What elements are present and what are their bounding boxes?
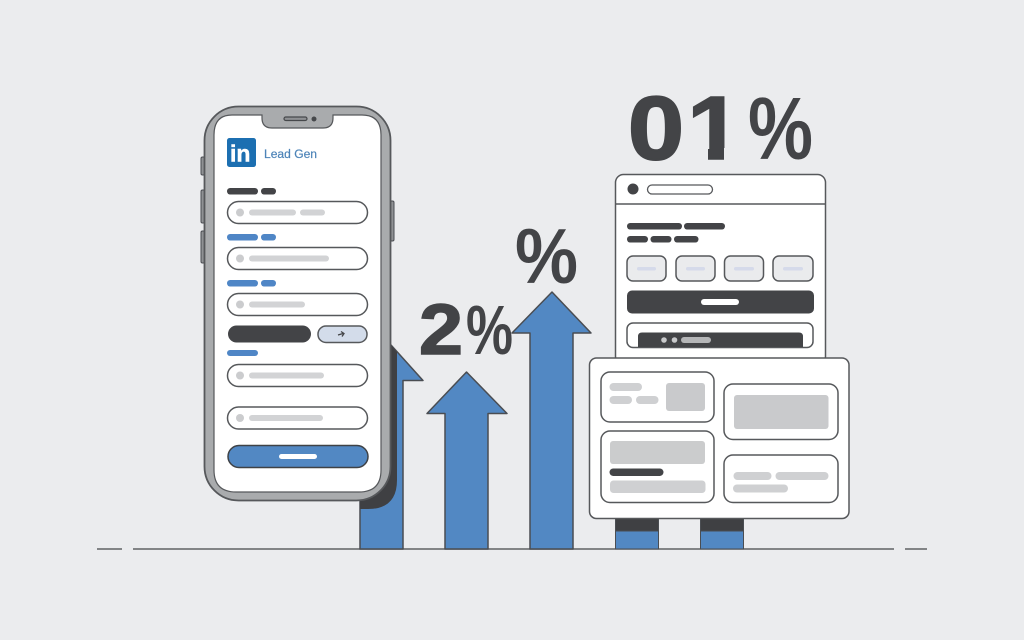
arrow: middle xyxy=(427,372,507,549)
icon: LinkedIn logo xyxy=(227,138,256,167)
label: 01% xyxy=(630,95,812,161)
phone xyxy=(201,106,397,509)
light arrow button xyxy=(318,326,367,342)
card: top right xyxy=(724,384,838,440)
browser window xyxy=(616,174,826,364)
embedded bar xyxy=(627,323,813,348)
arrow: tall xyxy=(512,292,591,549)
form field 1 xyxy=(227,188,368,224)
phone screen xyxy=(214,115,381,492)
heading: Lead Gen: Lead Gen xyxy=(264,149,317,161)
phone shadow xyxy=(360,345,397,509)
address bar xyxy=(648,185,712,194)
card: bottom right xyxy=(724,455,838,502)
icon: LinkedIn logo: in xyxy=(230,140,250,166)
submit button xyxy=(228,446,368,468)
phone body xyxy=(204,106,390,500)
label: 2%: 2 xyxy=(419,291,463,370)
arrow: short, behind phone xyxy=(360,345,423,549)
text lines xyxy=(627,223,725,242)
card: top left xyxy=(601,372,714,422)
speaker and camera xyxy=(284,116,316,122)
label: 2% xyxy=(419,291,513,370)
option tiles xyxy=(627,256,813,281)
support legs xyxy=(616,518,744,549)
dashboard panel xyxy=(590,358,849,518)
form field 4 xyxy=(227,350,368,386)
browser dot xyxy=(628,184,638,194)
primary button xyxy=(627,290,814,314)
dark button xyxy=(228,326,311,342)
label: 01%: 0 xyxy=(628,79,684,179)
phone side buttons xyxy=(201,157,394,263)
label: 2%: % xyxy=(466,291,513,369)
form field 5 xyxy=(228,407,368,429)
form field 3 xyxy=(227,280,368,316)
baseline xyxy=(97,548,927,550)
form field 2 xyxy=(227,234,368,270)
card: bottom left xyxy=(601,431,714,502)
label: 01%: % xyxy=(748,79,813,178)
label: 01%: 1 xyxy=(687,79,742,179)
label: top percent: % xyxy=(515,212,578,300)
